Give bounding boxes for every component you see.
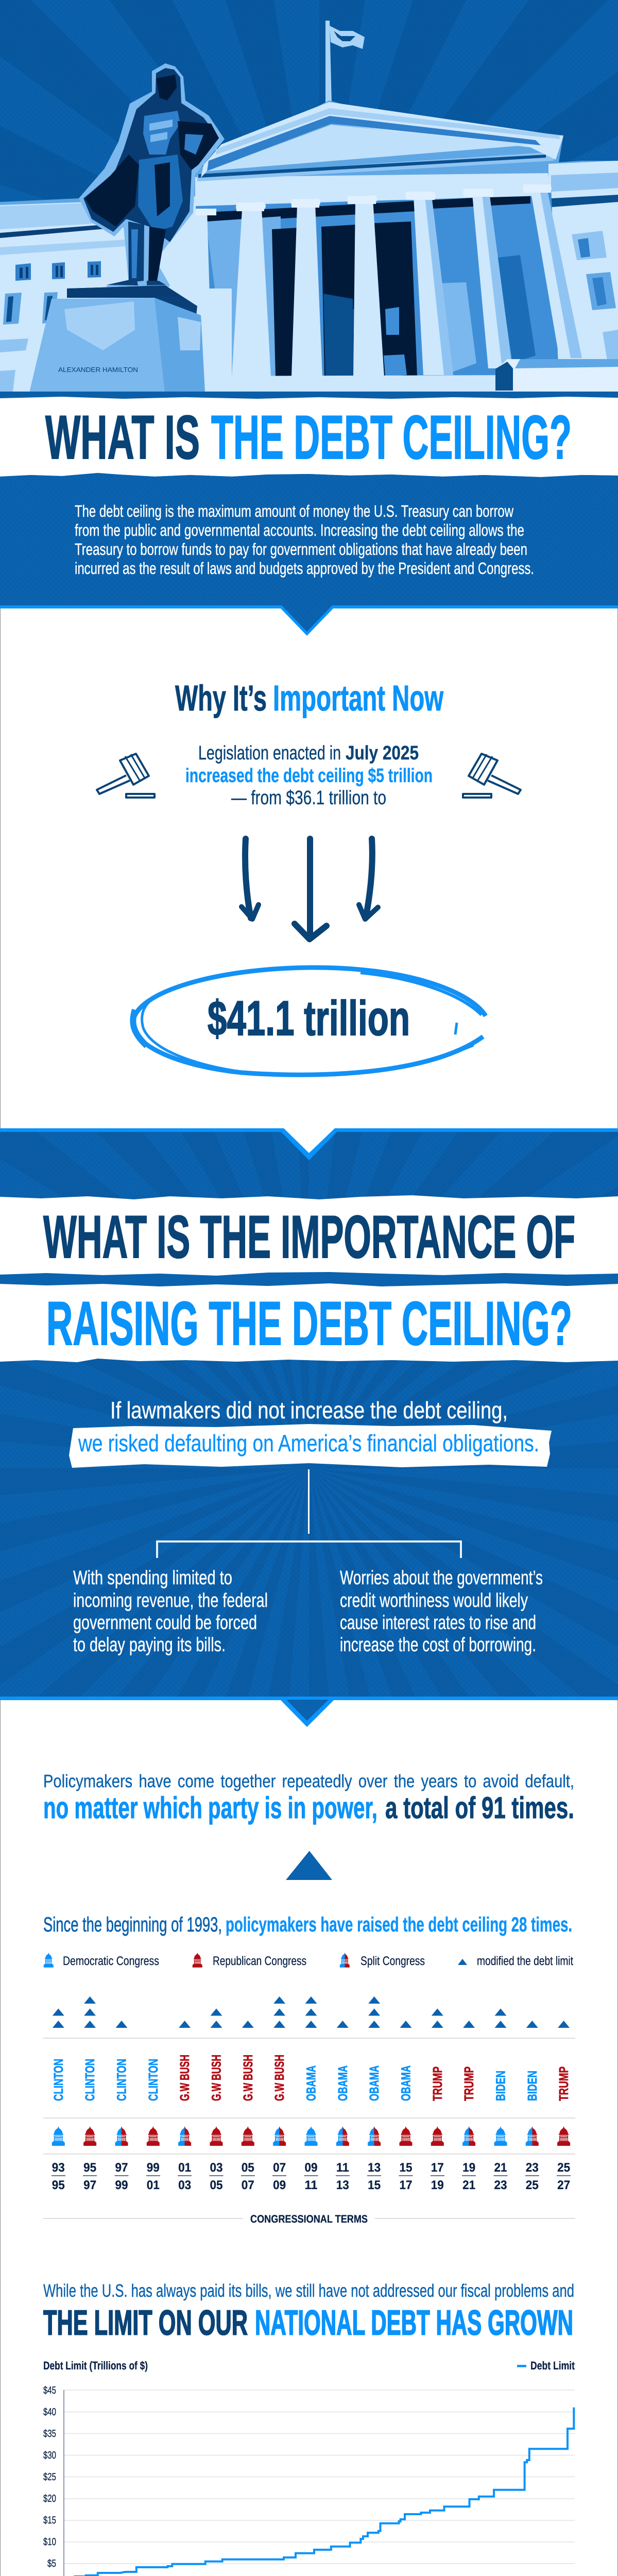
left wing: [0, 196, 206, 392]
congressional term years: 23: [526, 2161, 539, 2175]
legislation text: Legislation enacted in: [198, 742, 341, 764]
building rim: [0, 100, 618, 392]
right consequence text: increase the cost of borrowing.: [340, 1634, 536, 1656]
president names: OBAMA: [336, 2065, 350, 2101]
congressional term years: 11: [305, 2178, 317, 2192]
flag and flagpole: [325, 21, 365, 103]
president names: TRUMP: [462, 2066, 476, 2101]
statement: 91 times: [43, 1771, 574, 1825]
legend: modified the debt limit: [477, 1954, 573, 1968]
connector lines: [157, 1469, 461, 1558]
congressional term years: 09: [305, 2161, 317, 2175]
congressional term years: 21: [462, 2178, 475, 2192]
statue pedestal: ALEXANDER HAMILTON: [58, 366, 138, 374]
president names: G.W BUSH: [178, 2055, 192, 2101]
portico columns: [181, 184, 582, 384]
y axis labels: $15: [43, 2515, 56, 2526]
president names: [52, 2055, 571, 2101]
arrows pointing to amount: [242, 839, 378, 939]
congress control icons: [52, 2126, 570, 2146]
right consequence text: cause interest rates to rise and: [340, 1612, 536, 1634]
president names: BIDEN: [525, 2071, 540, 2101]
chart legend: [517, 2359, 575, 2372]
congressional term years: 19: [431, 2178, 444, 2192]
statement: 28 times: Since the beginning of 1993,: [43, 1913, 222, 1936]
portico recess: [196, 187, 559, 379]
y axis labels: $10: [43, 2536, 56, 2548]
y axis labels: $30: [43, 2450, 56, 2461]
subheading: Important Now: [273, 678, 443, 718]
legend: Republican Congress: [213, 1954, 306, 1968]
left consequence text: government could be forced: [73, 1612, 257, 1634]
congressional term years: 97: [115, 2161, 128, 2175]
president names: CLINTON: [83, 2059, 97, 2101]
legislation text: — from $36.1 trillion to: [231, 787, 386, 809]
president names: CLINTON: [146, 2059, 161, 2101]
congressional term years: 95: [52, 2178, 65, 2192]
congressional term years: 03: [210, 2161, 222, 2175]
congressional term years: 05: [210, 2178, 222, 2192]
president names: G.W BUSH: [209, 2055, 224, 2101]
entablature and pediment: [195, 102, 563, 206]
y axis labels: $5: [47, 2558, 56, 2569]
congressional term years: 07: [242, 2178, 254, 2192]
y axis labels: [43, 2385, 56, 2576]
statement line: If lawmakers did not increase the debt ceiling,: [110, 1397, 508, 1423]
legislation text: [185, 742, 433, 809]
congressional term years: 17: [431, 2161, 444, 2175]
y axis labels: $25: [43, 2471, 56, 2483]
icon: right gavel: [463, 754, 521, 798]
axis label: congressional terms: CONGRESSIONAL TERMS: [250, 2213, 368, 2225]
congressional term years: 99: [115, 2178, 128, 2192]
left consequence text: [73, 1567, 268, 1656]
debt limit modification markers: [53, 1996, 570, 2028]
congressional term years: 15: [400, 2161, 412, 2175]
president names: CLINTON: [114, 2059, 129, 2101]
heading: What is the debt ceiling: WHAT IS: [45, 403, 200, 472]
president names: G.W BUSH: [241, 2055, 255, 2101]
president names: TRUMP: [431, 2066, 445, 2101]
panel: debt ceiling definition: [0, 473, 618, 636]
legislation text: increased the debt ceiling $5 trillion: [185, 765, 433, 787]
congressional term years: 01: [178, 2161, 191, 2175]
y axis labels: $45: [43, 2385, 56, 2396]
right consequence text: Worries about the government’s: [340, 1567, 543, 1589]
left consequence text: With spending limited to: [73, 1567, 232, 1589]
steps and plinth: [198, 289, 618, 393]
icon: large triangle: [286, 1851, 332, 1880]
chart legend: Debt Limit: [530, 2359, 575, 2372]
congressional term years: 99: [147, 2161, 160, 2175]
subheading: [175, 678, 443, 718]
congressional term years: 19: [462, 2161, 475, 2175]
torn white banner: [69, 1424, 552, 1468]
congressional term years: 05: [242, 2161, 254, 2175]
congressional term years: 15: [368, 2178, 381, 2192]
statement: 91 times: no matter which party is in power,: [43, 1791, 377, 1825]
legislation text: July 2025: [346, 742, 419, 764]
statue figure: [83, 68, 219, 285]
subheading: Why It’s: [175, 678, 267, 718]
panel: bipartisan history: [43, 1771, 575, 2225]
right consequence text: [340, 1567, 543, 1656]
y axis labels: $40: [43, 2406, 56, 2418]
sky with sunburst: [0, 0, 618, 399]
dark doorways: [272, 222, 417, 377]
congressional term years: 27: [557, 2178, 570, 2192]
congressional term years: 93: [52, 2161, 65, 2175]
statement: limit has grown: THE LIMIT ON OUR: [43, 2303, 248, 2342]
right consequence text: credit worthiness would likely: [340, 1590, 528, 1612]
down arrow tab: [0, 1697, 618, 1727]
congressional term years: 25: [557, 2161, 570, 2175]
chart title: Debt Limit (Trillions of $): [43, 2359, 148, 2372]
congressional term years: 25: [526, 2178, 539, 2192]
y axis labels: $20: [43, 2493, 56, 2504]
definition text: [75, 502, 534, 578]
line chart: debt limit: [43, 2359, 575, 2576]
congressional term years: 03: [178, 2178, 191, 2192]
president names: TRUMP: [557, 2066, 571, 2101]
statement: limit has grown: [43, 2281, 574, 2342]
icon: left gavel: [97, 754, 154, 798]
president names: G.W BUSH: [272, 2055, 287, 2101]
congressional term years: 17: [400, 2178, 412, 2192]
congressional term years: 21: [494, 2161, 507, 2175]
debt limit line: [64, 2408, 574, 2576]
congressional term years: 13: [336, 2178, 349, 2192]
statue pedestal: [29, 285, 205, 393]
congressional term years: 07: [273, 2161, 286, 2175]
president names: OBAMA: [304, 2065, 318, 2101]
left consequence text: incoming revenue, the federal: [73, 1590, 268, 1612]
congressional term years: [52, 2161, 571, 2192]
statement: 28 times: [43, 1913, 572, 1936]
y axis labels: $35: [43, 2428, 56, 2439]
president names: BIDEN: [493, 2071, 508, 2101]
hero illustration: Treasury building and Hamilton statue: [0, 0, 618, 399]
president names: OBAMA: [399, 2065, 413, 2101]
legend: Democratic Congress: [63, 1954, 159, 1968]
congressional term years: 09: [273, 2178, 286, 2192]
torn blue strip: [0, 1272, 618, 1286]
statue rim: [79, 63, 225, 292]
heading: What is the debt ceiling: [45, 403, 572, 472]
panel: consequences of not raising: [0, 1357, 618, 1727]
congressional term years: 01: [147, 2178, 160, 2192]
congressional term years: 23: [494, 2178, 507, 2192]
legend: [44, 1953, 573, 1968]
congressional term years: 97: [83, 2178, 96, 2192]
congressional term years: 13: [368, 2161, 381, 2175]
amount: $41.1 trillion: $41.1 trillion: [208, 991, 410, 1046]
congressional term years: 95: [83, 2161, 96, 2175]
left consequence text: to delay paying its bills.: [73, 1634, 226, 1656]
president names: CLINTON: [52, 2059, 66, 2101]
white band below hero: [0, 397, 618, 400]
panel: importance band top: [0, 1128, 618, 1201]
panel: why it's important now: [97, 678, 521, 1076]
oval brush stroke: [133, 968, 486, 1076]
congressional term years: 11: [336, 2161, 349, 2175]
hero bottom dark strip: [0, 392, 618, 399]
president names: OBAMA: [367, 2065, 382, 2101]
right wing: [548, 161, 618, 392]
legend: Split Congress: [360, 1954, 425, 1968]
